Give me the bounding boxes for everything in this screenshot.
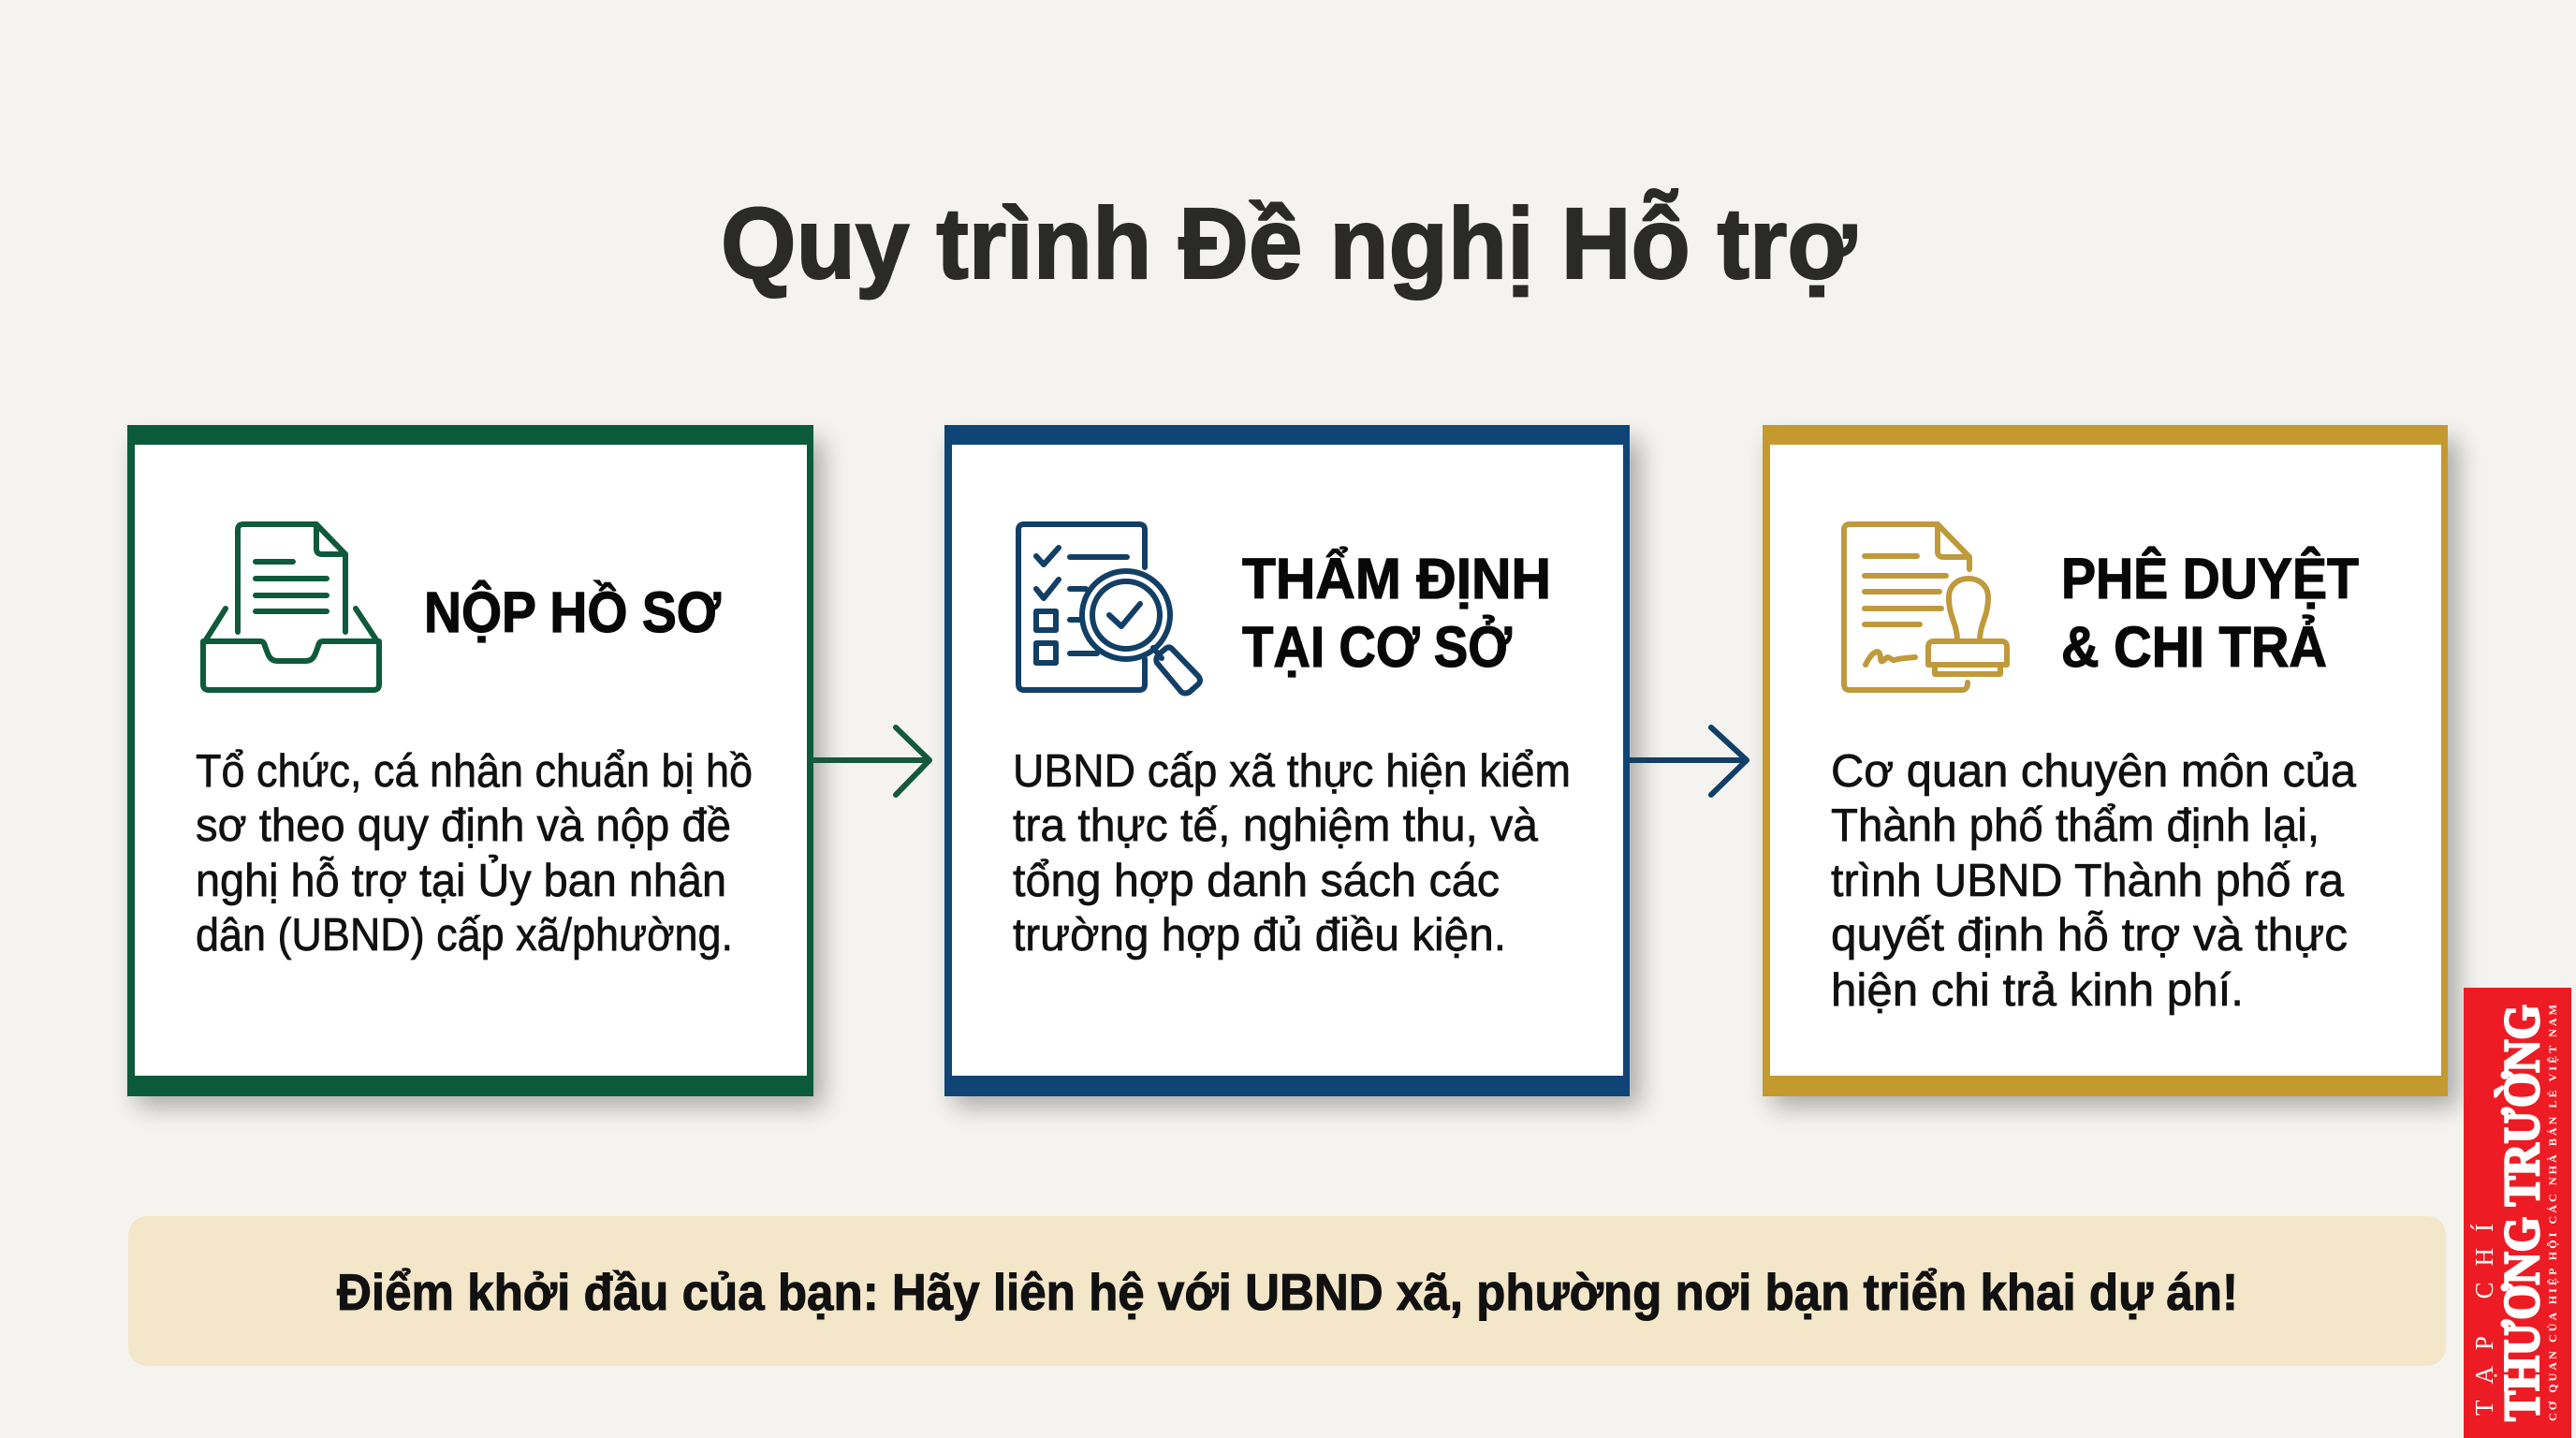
text block [1013,746,1571,961]
text block: tổng hợp danh sách các [1013,856,1500,906]
logo: tạp chí thương trường: CƠ QUAN CỦA HIỆP HỘI CÁC NHÀ BÁN LẺ VIỆT NAM [2546,1005,2559,1421]
logo: tạp chí thương trường [2464,988,2571,1438]
text block [1831,746,2357,1016]
icon: document with stamp [1844,524,2007,690]
text block: nghị hỗ trợ tại Ủy ban nhân [196,855,726,906]
text block: UBND cấp xã thực hiện kiểm [1013,746,1571,797]
text block: sơ theo quy định và nộp đề [196,800,731,851]
text block: hiện chi trả kinh phí. [1831,965,2244,1016]
heading: & CHI TRẢ [2061,615,2327,679]
callout: Điểm khởi đầu của bạn: Hãy liên hệ với UBND xã, phường nơi bạn triển khai dự án! [337,1263,2238,1321]
text block [196,746,753,961]
logo: tạp chí thương trường: THƯƠNG TRƯỜNG [2494,1005,2550,1421]
text block: quyết định hỗ trợ và thực [1831,910,2348,961]
text block: tra thực tế, nghiệm thu, và [1013,800,1539,851]
panel: phê duyệt và chi trả [1763,425,2458,1107]
panel: thẩm định tại cơ sở [944,425,1640,1107]
heading: THẨM ĐỊNH [1242,547,1551,610]
heading: PHÊ DUYỆT [2061,547,2359,610]
icon: checklist with magnifier [1018,524,1200,693]
heading: NỘP HỒ SƠ [424,580,721,644]
panel: nộp hồ sơ [127,425,823,1107]
heading: TẠI CƠ SỞ [1242,615,1512,679]
text block: trình UBND Thành phố ra [1831,856,2345,906]
arrow: step 1 to step 2 [813,727,929,795]
title: Quy trình Đề nghị Hỗ trợ [721,186,1856,300]
heading [2061,547,2359,679]
text block: Cơ quan chuyên môn của [1831,746,2357,797]
arrow: step 2 to step 3 [1630,727,1747,795]
icon: document in tray [203,524,379,690]
heading [1242,547,1551,679]
text block: trường hợp đủ điều kiện. [1013,910,1506,961]
logo: tạp chí thương trường: TẠP CHÍ [2470,1224,2498,1416]
text block: Thành phố thẩm định lại, [1831,800,2320,851]
text block: dân (UBND) cấp xã/phường. [196,910,733,961]
text block: Tổ chức, cá nhân chuẩn bị hồ [196,746,753,797]
callout [128,1216,2446,1366]
